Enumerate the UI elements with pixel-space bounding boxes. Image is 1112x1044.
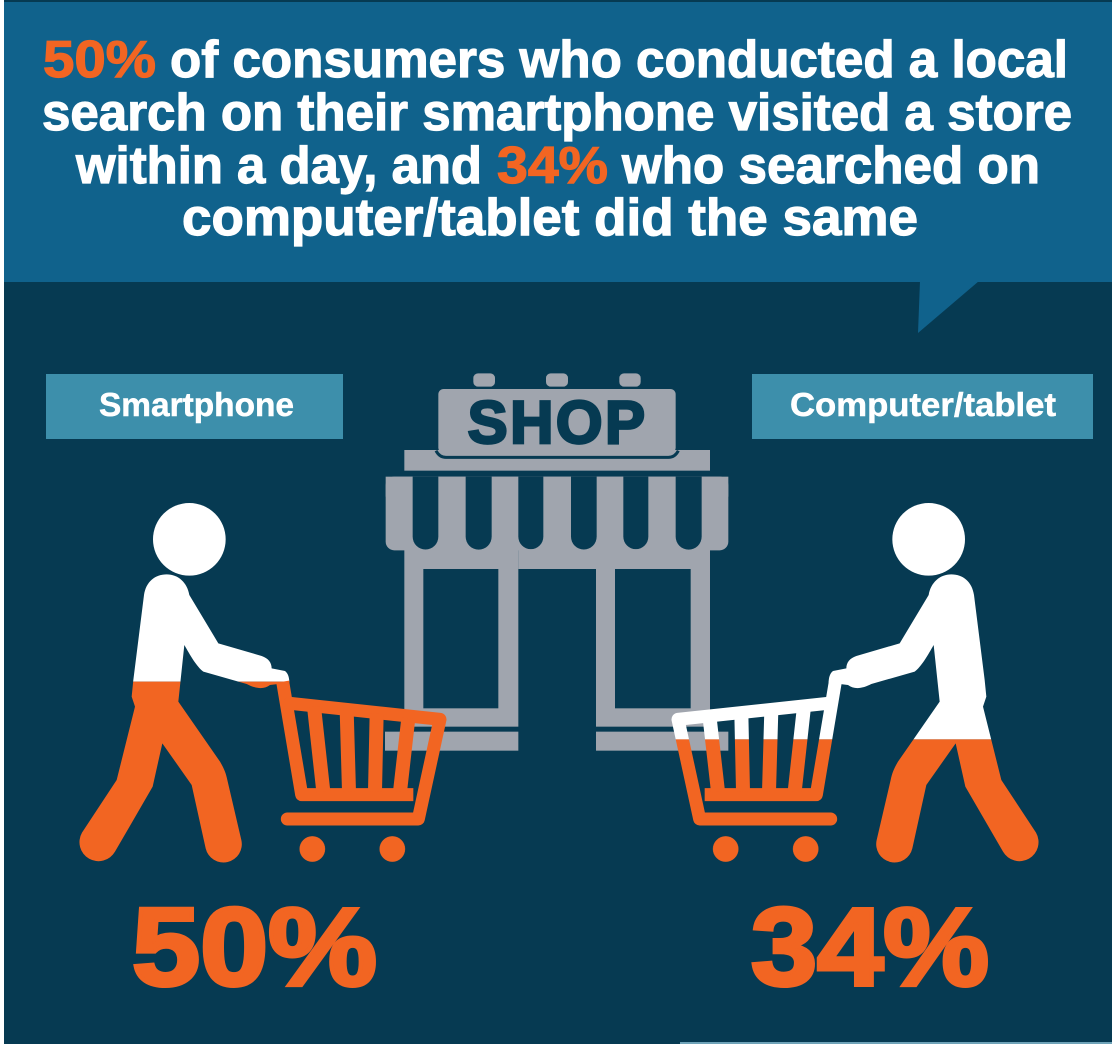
- icon: shopping cart: [678, 682, 835, 862]
- icon: head: [153, 503, 226, 576]
- icon: head: [892, 503, 965, 576]
- icon: shop: SHOP: [468, 389, 645, 456]
- header speech bubble: [4, 2, 1112, 333]
- label: computer/tablet: [752, 374, 1093, 439]
- headline text: [42, 31, 1072, 247]
- icon: person body: [79, 574, 289, 862]
- headline text: 34%: [497, 137, 608, 195]
- figure: smartphone shopper with cart, 50% filled: [79, 503, 440, 862]
- statistic: 34%: 34%: [751, 886, 989, 1009]
- icon: shopping cart: [283, 682, 440, 862]
- headline text: 50%: [43, 31, 156, 89]
- headline text: of consumers who conducted a local: [170, 31, 1068, 89]
- headline text: who searched on: [621, 137, 1040, 195]
- statistic: 50%: 50%: [132, 886, 377, 1009]
- label: computer/tablet: Computer/tablet: [790, 386, 1056, 423]
- label: smartphone: [46, 374, 343, 439]
- icon: shop: [385, 373, 728, 751]
- label: smartphone: Smartphone: [99, 386, 294, 423]
- figure: computer/tablet shopper with cart, 34% filled: [678, 503, 1039, 862]
- headline text: within a day, and: [75, 137, 482, 195]
- bottom edge strip: [680, 1042, 1112, 1044]
- headline text: computer/tablet did the same: [182, 189, 918, 247]
- headline text: search on their smartphone visited a store: [42, 84, 1072, 142]
- icon: person body: [829, 574, 1039, 862]
